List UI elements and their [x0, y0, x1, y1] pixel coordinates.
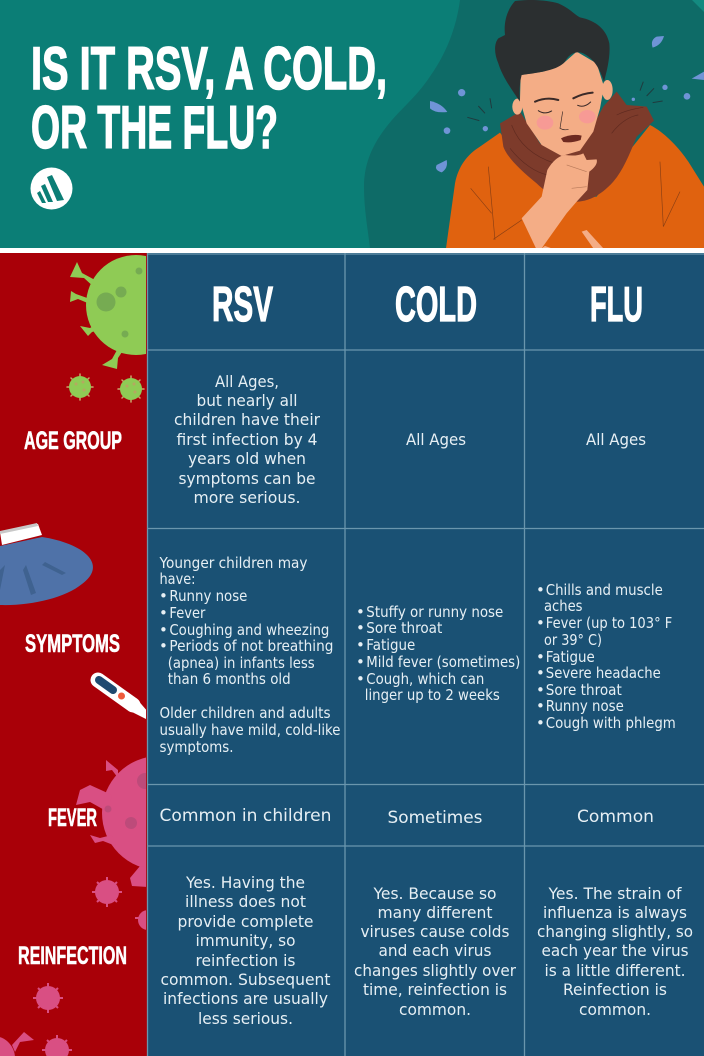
cell: flu symptoms: Fatigue [546, 648, 595, 666]
cell: flu reinfection: Reinfection is [563, 980, 667, 999]
cell: flu symptoms: Fever (up to 103° F [546, 614, 672, 632]
icon: large pink virus [76, 758, 146, 887]
cell: flu symptoms: Runny nose [546, 697, 624, 715]
cell: RSV reinfection: reinfection is [196, 951, 296, 970]
cell: cold symptoms: • [356, 636, 365, 654]
cell: cold symptoms: Cough, which can [366, 670, 484, 688]
cell: flu symptoms: Cough with phlegm [546, 714, 676, 732]
sweater and hand detail lines [471, 162, 680, 240]
cell: RSV symptoms: usually have mild, cold-like [160, 721, 340, 739]
cell: flu symptoms: • [536, 648, 545, 666]
cell: cold reinfection: time, reinfection is [363, 980, 507, 999]
hair [495, 0, 610, 102]
cell: cold symptoms: linger up to 2 weeks [365, 686, 500, 704]
cell: RSV fever: Common in children [160, 806, 332, 826]
cell: flu symptoms: • [536, 697, 545, 715]
facial features [535, 93, 593, 130]
cell: RSV age group: more serious. [194, 488, 300, 507]
cell: RSV age group: first infection by 4 [176, 430, 318, 449]
lower fingers [542, 230, 603, 248]
cell: RSV symptoms: • [159, 637, 168, 655]
cell: cold symptoms: • [356, 619, 365, 637]
cell: cold reinfection: common. [399, 1000, 471, 1019]
cell: cold reinfection: changes slightly over [354, 961, 516, 980]
cell: flu symptoms: • [536, 714, 545, 732]
cell: flu symptoms: • [536, 681, 545, 699]
cell: RSV symptoms: Coughing and wheezing [169, 621, 329, 639]
cell: flu symptoms: • [536, 664, 545, 682]
cell: cold symptoms: Stuffy or runny nose [366, 603, 503, 621]
cell: flu reinfection: Yes. The strain of [548, 884, 682, 903]
white divider band [0, 248, 704, 253]
title: OR THE FLU? [31, 94, 278, 161]
illustration: coughing person [430, 0, 704, 248]
label: age group: AGE GROUP [24, 427, 122, 455]
mouth [561, 135, 582, 142]
cell: RSV symptoms: Older children and adults [160, 704, 331, 722]
cell: flu reinfection [537, 884, 693, 1019]
hand [522, 153, 597, 248]
column heading: COLD: COLD [395, 278, 477, 332]
cell: RSV symptoms: • [159, 604, 168, 622]
label: reinfection: REINFECTION [18, 942, 127, 970]
cell: cold reinfection: viruses cause colds [360, 922, 510, 941]
cheeks [537, 110, 596, 130]
icon: ice pack [0, 523, 93, 605]
icon: small pink viruses [0, 877, 158, 1056]
cell: RSV symptoms: Periods of not breathing [169, 637, 333, 655]
cell: RSV symptoms [159, 554, 340, 756]
cough lines [467, 82, 663, 121]
cell: cold symptoms: • [356, 653, 365, 671]
cell: cold symptoms: Fatigue [366, 636, 415, 654]
cell: cold reinfection [354, 884, 516, 1019]
cell: flu symptoms: Chills and muscle [546, 581, 663, 599]
column heading: FLU: FLU [590, 278, 643, 332]
cell: flu age group: All Ages [586, 430, 646, 449]
cell: RSV symptoms: Runny nose [169, 587, 247, 605]
cell: RSV age group: children have their [174, 410, 320, 429]
cell: flu symptoms: Sore throat [546, 681, 622, 699]
cell: cold symptoms: Sore throat [366, 619, 442, 637]
cell: RSV symptoms: Younger children may [159, 554, 308, 572]
label: fever: FEVER [48, 804, 97, 832]
cell: cold reinfection: Yes. Because so [373, 884, 496, 903]
cell: cold reinfection: and each virus [378, 941, 492, 960]
cell: RSV age group: but nearly all [196, 391, 298, 410]
cell: cold symptoms: • [356, 670, 365, 688]
cell: flu reinfection: influenza is always [543, 903, 687, 922]
title [31, 35, 387, 161]
cell: flu symptoms: • [536, 614, 545, 632]
label: symptoms: SYMPTOMS [25, 630, 120, 658]
cell: RSV symptoms: symptoms. [160, 738, 234, 756]
cell: cold symptoms: Mild fever (sometimes) [366, 653, 520, 671]
logo [30, 168, 72, 210]
cell: flu symptoms: Severe headache [546, 664, 661, 682]
cell: cold symptoms: • [356, 603, 365, 621]
cell: RSV symptoms: • [159, 587, 168, 605]
sweater [446, 125, 704, 248]
cell: flu symptoms: or 39° C) [544, 631, 602, 649]
cell: RSV reinfection: illness does not [185, 892, 306, 911]
cell: flu reinfection: is a little different. [544, 961, 686, 980]
icon: small green virus left [67, 374, 93, 400]
cell: RSV age group [174, 372, 320, 507]
scarf [500, 92, 654, 202]
cell: RSV symptoms: Fever [169, 604, 206, 622]
cell: RSV reinfection: provide complete [178, 912, 314, 931]
comparison table [147, 253, 704, 1056]
droplets [430, 36, 704, 172]
cell: RSV age group: All Ages, [215, 372, 279, 391]
cell: RSV age group: symptoms can be [178, 469, 316, 488]
cell: flu reinfection: changing slightly, so [537, 922, 693, 941]
cell: RSV age group: years old when [188, 449, 306, 468]
cell: flu fever: Common [577, 807, 654, 827]
cell: RSV reinfection: common. Subsequent [160, 970, 330, 989]
cell: flu reinfection: common. [579, 1000, 651, 1019]
cell: RSV symptoms: than 6 months old [168, 670, 291, 688]
scarf folds [510, 107, 643, 175]
cell: cold age group: All Ages [406, 430, 466, 449]
ears [512, 80, 613, 115]
cell: cold symptoms [356, 603, 520, 704]
icon: large green virus [70, 255, 146, 369]
face [520, 52, 604, 156]
title: IS IT RSV, A COLD, [31, 35, 387, 102]
cell: flu symptoms [536, 581, 676, 732]
cell: RSV reinfection: Yes. Having the [185, 873, 305, 892]
cell: flu symptoms: aches [544, 597, 583, 615]
left column: row labels [0, 253, 147, 1056]
cell: flu symptoms: • [536, 581, 545, 599]
icon: thermometer [98, 680, 148, 719]
cell: cold fever: Sometimes [388, 808, 483, 828]
cell: cold reinfection: many different [378, 903, 492, 922]
cell: RSV reinfection: infections are usually [163, 989, 328, 1008]
cell: RSV reinfection [160, 873, 330, 1028]
column heading: RSV: RSV [212, 278, 273, 332]
cell: RSV symptoms: (apnea) in infants less [168, 654, 315, 672]
cell: RSV symptoms: • [159, 621, 168, 639]
header banner [0, 0, 704, 248]
cell: RSV reinfection: immunity, so [196, 931, 296, 950]
cell: flu reinfection: each year the virus [542, 941, 688, 960]
cell: RSV reinfection: less serious. [198, 1009, 293, 1028]
cell: RSV symptoms: have: [160, 570, 196, 588]
icon: small green virus right [118, 376, 144, 402]
